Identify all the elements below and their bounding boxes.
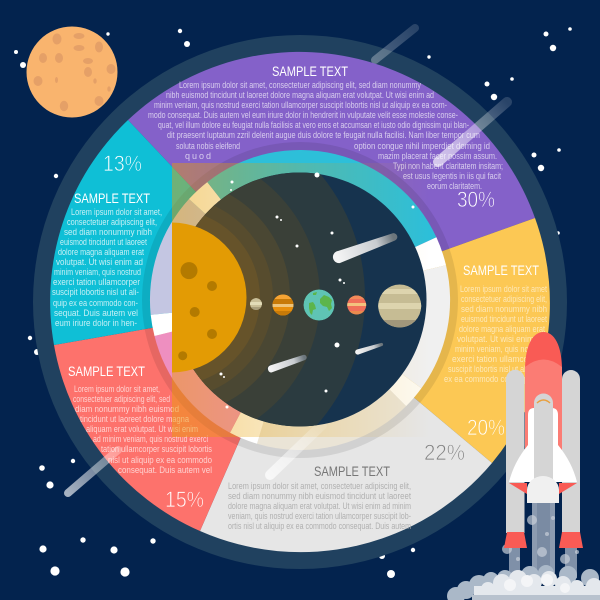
body copy: grey: Lorem ipsum dolor sit amet, consectetuer adipiscing elit, bbox=[228, 481, 411, 491]
rocket: cockpit arc bbox=[537, 400, 550, 403]
body copy: purple: nibh euismod tincidunt ut laoreet dolore magna aliquam erat volutpat. Ut wisi enim ad bbox=[166, 90, 434, 100]
body copy: cyan: eum iriure dolor in hen- bbox=[55, 318, 137, 328]
body copy: red: Lorem ipsum dolor sit amet, bbox=[74, 384, 160, 394]
body copy: purple: Lorem ipsum dolor sit amet, consectetuer adipiscing elit, sed diam nonummy bbox=[179, 80, 421, 90]
body copy: purple: mazim placerat facer possim assum. bbox=[378, 151, 497, 161]
comet: lower left bbox=[268, 355, 307, 372]
rocket: left booster bbox=[506, 370, 524, 533]
body copy: purple: dit praesent luptatum zzril delenit augue duis dolore te feugait nulla facilisi. Nam liber tempor cum bbox=[167, 130, 480, 140]
slice: yellow 20% bbox=[300, 218, 550, 463]
heading: yellow: SAMPLE TEXT bbox=[463, 262, 539, 278]
body copy: yellow: volutpat. Ut wisi enim ad bbox=[457, 334, 545, 344]
body copy: cyan: euismod tincidunt ut laoreet bbox=[60, 237, 147, 247]
body copy: red: ad minim veniam, quis nostrud exerci bbox=[93, 434, 208, 444]
shooting star: lower left bbox=[68, 450, 118, 493]
text block: red slice bbox=[68, 363, 212, 512]
rocket: right nozzle bbox=[559, 532, 583, 548]
space shuttle rocket bbox=[504, 332, 583, 548]
body copy: yellow: exerci tation ullamcorper bbox=[452, 354, 543, 364]
percentage: 13%: 13% bbox=[103, 151, 142, 176]
body copy: yellow: ex ea commodo consequat. bbox=[444, 374, 538, 384]
body copy: grey bbox=[228, 481, 411, 531]
rocket: right booster bbox=[562, 370, 580, 533]
body copy: cyan: Lorem ipsum dolor sit amet, bbox=[71, 207, 162, 217]
segment: pink bbox=[154, 300, 300, 433]
inner segmented ring bbox=[150, 150, 450, 450]
planet: jupiter bbox=[378, 284, 422, 328]
body copy: red: consequat. Duis autem vel bbox=[118, 465, 212, 475]
exhaust plumes bbox=[502, 503, 579, 578]
body copy: cyan: suscipit lobortis nisl ut ali- bbox=[52, 287, 139, 297]
planet: mercury bbox=[250, 298, 262, 310]
planet: earth bbox=[304, 290, 334, 320]
text block: grey slice bbox=[228, 440, 465, 531]
body copy: cyan: dolore magna aliquam erat bbox=[58, 247, 144, 257]
text block: cyan slice bbox=[52, 151, 162, 328]
body copy: yellow: consectetuer adipiscing elit, bbox=[461, 294, 547, 304]
body copy: purple: soluta nobis eleifend bbox=[176, 141, 240, 151]
body copy: red: consectetuer adipiscing elit, sed bbox=[73, 394, 170, 404]
planet: mars bbox=[347, 296, 366, 314]
slice: grey 22% bbox=[200, 302, 492, 552]
body copy: yellow: sed diam nonummy nibh bbox=[461, 304, 547, 314]
segment: white stripe left bbox=[151, 300, 300, 336]
shooting star: bottom centre bbox=[270, 425, 322, 475]
body copy: cyan: quip ex ea commodo con- bbox=[53, 298, 138, 308]
percentage: 20%: 20% bbox=[467, 415, 505, 440]
body copy: purple: est usus legentis in iis qui facit bbox=[403, 171, 501, 181]
shooting star: top bbox=[375, 28, 415, 60]
body copy: red: aliquam erat volutpat. Ut wisi enim bbox=[86, 424, 198, 434]
body copy: purple bbox=[148, 80, 503, 191]
inner shadow ring bbox=[142, 142, 458, 458]
rocket: centre column bbox=[534, 394, 553, 480]
body copy: grey: ortis nisl ut aliquip ex ea commodo consequat. Duis autem bbox=[228, 521, 411, 531]
body copy: purple: Typi non habent claritatem insitam; bbox=[393, 161, 503, 171]
segment: light grey bbox=[300, 265, 450, 388]
text block: yellow slice bbox=[444, 262, 547, 440]
planet: orange moon top left bbox=[26, 26, 118, 118]
segment: beige bottom bbox=[257, 300, 406, 450]
body copy: grey: veniam, quis nostrud exerci tation ullamcorper suscipit lob- bbox=[228, 511, 411, 521]
rocket: main tank lower bbox=[525, 360, 562, 453]
body copy: purple: quat, vel illum dolore eu feugiat nulla facilisis at vero eros et accumsan et iusto odio dignissim qui blan- bbox=[158, 120, 469, 130]
body copy: red bbox=[73, 384, 212, 475]
body copy: yellow: minim veniam, quis nostrud bbox=[455, 344, 545, 354]
percentage: 15%: 15% bbox=[165, 487, 204, 512]
body copy: red: tation ullamcorper suscipit lobortis bbox=[101, 444, 212, 454]
body copy: purple: option congue nihil imperdiet doming id bbox=[354, 141, 490, 151]
body copy: yellow: suscipit lobortis nisl ut aliquip bbox=[448, 364, 541, 374]
pie chart bbox=[50, 52, 550, 552]
heading: grey: SAMPLE TEXT bbox=[314, 463, 390, 479]
comet: small bbox=[355, 343, 383, 355]
segment: white stripe bottom left bbox=[230, 300, 300, 444]
rocket: shuttle body bbox=[509, 408, 577, 482]
heading: purple: SAMPLE TEXT bbox=[272, 63, 348, 79]
text block: purple slice bbox=[148, 63, 503, 212]
segment: pale stripe top left bbox=[189, 182, 300, 300]
segment: lavender bbox=[150, 199, 300, 315]
segment: white stripe lower right bbox=[300, 300, 421, 406]
slice: purple 30% bbox=[128, 52, 535, 302]
body copy: cyan: sed diam nonummy nibh bbox=[64, 227, 152, 237]
segment: white stripe right bbox=[300, 237, 446, 300]
rocket: shuttle wings bbox=[509, 483, 527, 494]
body copy: cyan bbox=[52, 207, 162, 328]
body copy: yellow: euismod tincidunt ut laoreet bbox=[461, 314, 547, 324]
comet: large bbox=[333, 233, 397, 263]
dark space disc with sun glow rings bbox=[193, 172, 426, 426]
rocket: main tank bbox=[525, 332, 562, 453]
smoke cloud bbox=[447, 565, 600, 600]
body copy: red: nisl ut aliquip ex ea commodo bbox=[108, 455, 212, 465]
percentage: 30%: 30% bbox=[457, 187, 495, 212]
body copy: purple: eorum claritatem. bbox=[427, 181, 482, 191]
body copy: cyan: minim veniam, quis nostrud bbox=[54, 267, 141, 277]
planet: venus bbox=[272, 294, 294, 316]
rocket: left nozzle bbox=[504, 532, 527, 548]
body copy: cyan: consectetuer adipiscing elit, bbox=[67, 217, 157, 227]
body copy: red: diam nonummy nibh euismod bbox=[75, 404, 179, 414]
disc stars bbox=[220, 172, 414, 408]
sun bbox=[172, 222, 246, 372]
outer ring bbox=[33, 35, 567, 569]
body copy: purple: q u o d bbox=[185, 151, 211, 161]
body copy: cyan: exerci tation ullamcorper bbox=[53, 277, 140, 287]
body copy: purple: modo consequat. Duis autem vel eum iriure dolor in hendrerit in vulputate velit esse molestie conse- bbox=[148, 110, 458, 120]
body copy: yellow: Lorem ipsum dolor sit amet bbox=[460, 284, 547, 294]
body copy: grey: sed diam nonummy nibh euismod tincidunt ut laoreet bbox=[228, 491, 411, 501]
slice: cyan 13% bbox=[50, 120, 300, 345]
body copy: yellow: dolore magna aliquam erat bbox=[459, 324, 545, 334]
body copy: cyan: volutpat. Ut wisi enim ad bbox=[56, 257, 143, 267]
segment: cyan bbox=[207, 150, 436, 300]
shooting star: upper right bbox=[438, 102, 507, 162]
body copy: grey: dolore magna aliquam erat volutpat. Ut wisi enim ad minim bbox=[228, 501, 411, 511]
slice: red 15% bbox=[54, 302, 300, 531]
body copy: cyan: sequat. Duis autem vel bbox=[54, 308, 138, 318]
percentage: 22%: 22% bbox=[424, 440, 465, 465]
body copy: yellow bbox=[444, 284, 547, 384]
heading: red: SAMPLE TEXT bbox=[68, 363, 145, 379]
rocket: engine dome bbox=[527, 476, 559, 503]
body copy: red: tincidunt ut laoreet dolore magna bbox=[80, 414, 189, 424]
sun glow panel bbox=[172, 163, 430, 437]
heading: cyan: SAMPLE TEXT bbox=[74, 190, 150, 206]
body copy: purple: minim veniam, quis nostrud exerci tation ullamcorper suscipit lobortis nisl ut aliquip ex ea com- bbox=[154, 100, 447, 110]
